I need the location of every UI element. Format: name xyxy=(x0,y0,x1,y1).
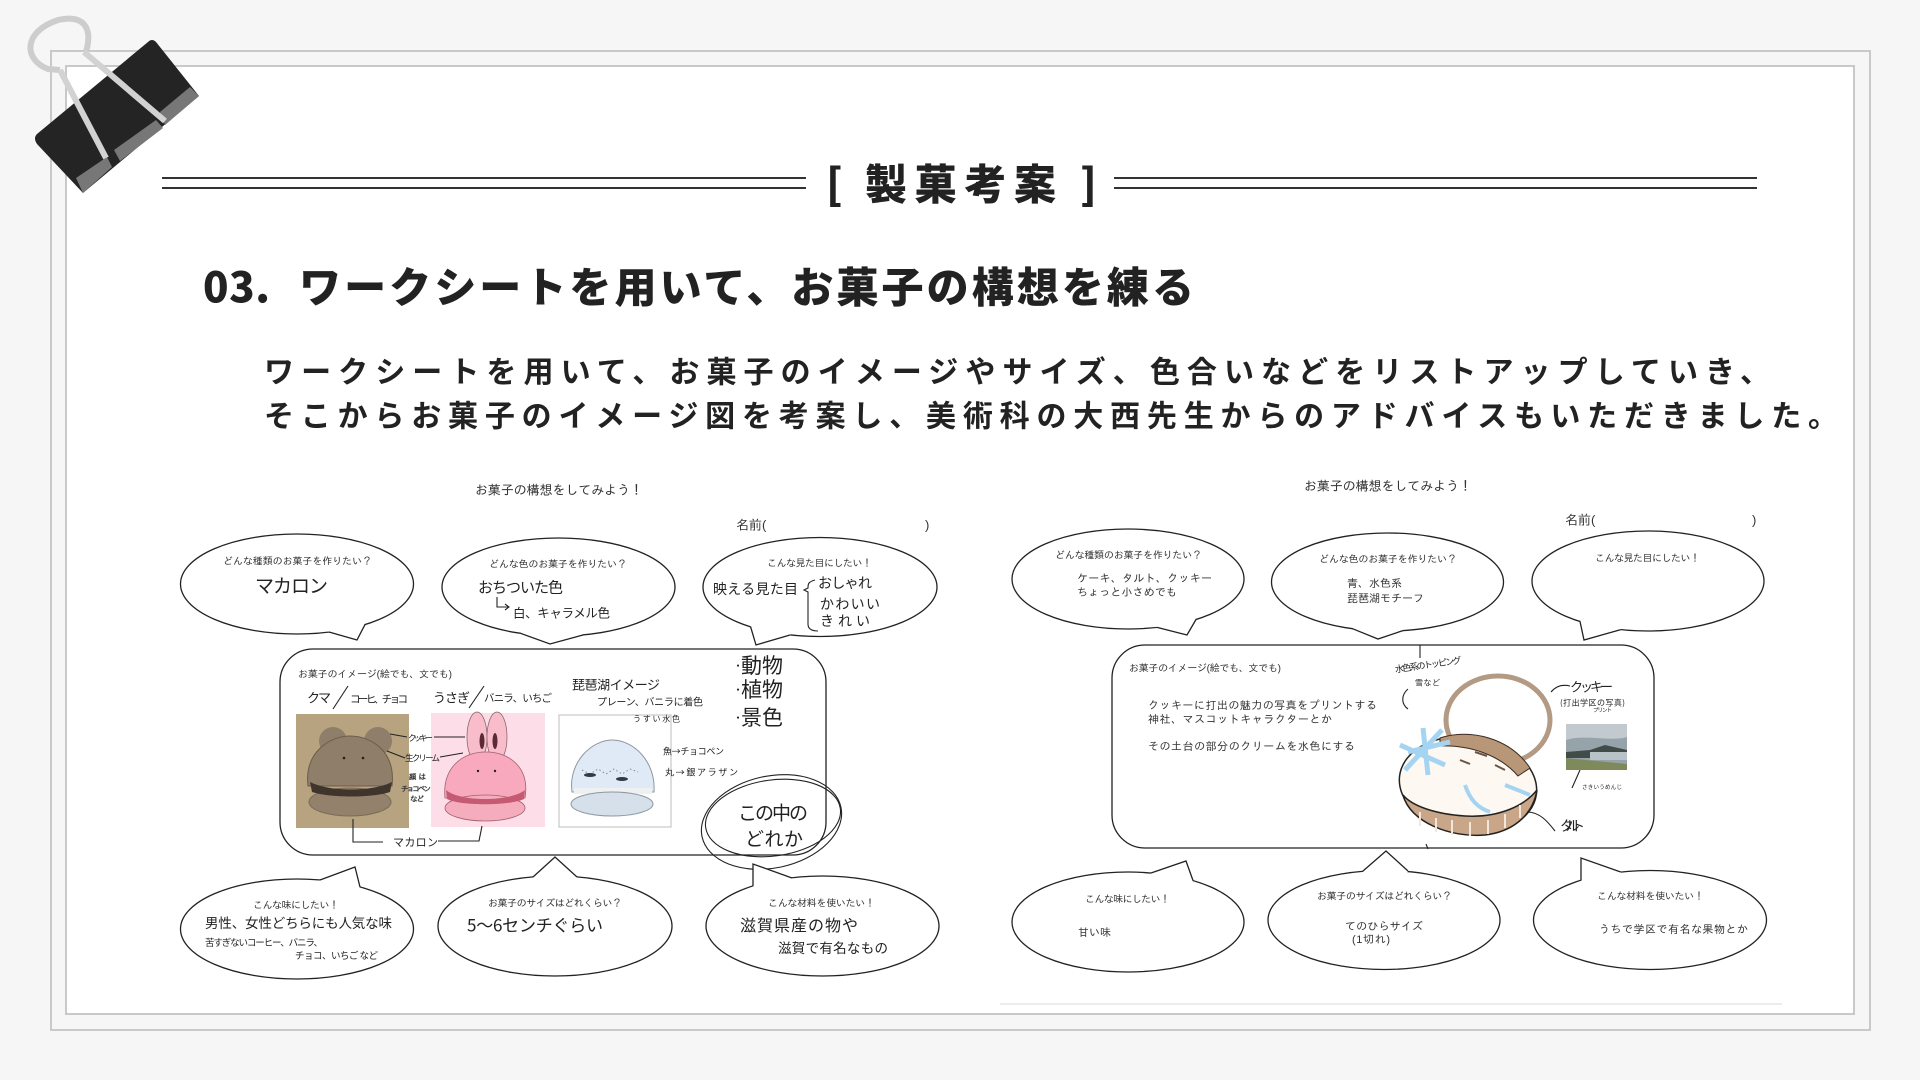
callouts: tart notes: (打出学区の写真) xyxy=(1560,698,1625,708)
callouts: tart notes: タルト xyxy=(1560,816,1585,836)
balloon: color: 白、キャラメル色 xyxy=(513,602,610,622)
notes: lake macaron xyxy=(572,674,738,778)
label: bear: クマ xyxy=(307,688,331,706)
balloon: color: 琵琶湖モチーフ xyxy=(1347,593,1424,605)
balloon: taste xyxy=(180,867,414,979)
image box right: お菓子のイメージ(絵でも、文でも) xyxy=(1129,662,1281,674)
name field right: ) xyxy=(1752,512,1756,528)
callouts: tart notes: 水色系のトッピング xyxy=(1394,653,1462,675)
balloon: taste: こんな味にしたい！ xyxy=(1085,894,1170,906)
balloon: type: どんな種類のお菓子を作りたい？ xyxy=(223,556,372,568)
worksheet title left: お菓子の構想をしてみよう！ xyxy=(475,482,643,498)
balloon: size: てのひらサイズ xyxy=(1345,920,1423,933)
title: 製菓考案 xyxy=(865,152,1056,212)
balloon: material: こんな材料を使いたい！ xyxy=(768,898,875,910)
notes: motif list xyxy=(733,650,783,732)
text: idea notes: クッキーに打出の魅力の写真をプリントする xyxy=(1148,699,1377,712)
callouts: macaron notes xyxy=(353,732,482,850)
worksheet title right: お菓子の構想をしてみよう！ xyxy=(1304,478,1472,494)
balloon: taste: 苦すぎないコーヒー、バニラ、 xyxy=(205,935,323,949)
notes: motif list: 植物 xyxy=(741,674,783,704)
title: [ xyxy=(826,152,843,212)
balloon: taste xyxy=(1012,861,1244,972)
balloon: look: かわいい xyxy=(820,594,880,614)
name field left: ) xyxy=(925,518,929,532)
image box left xyxy=(280,649,851,882)
balloon: color: おちついた色 xyxy=(478,576,563,598)
callouts: macaron notes: チョコペン xyxy=(401,784,431,794)
heading: ワークシートを用いて、お菓子の構想を練る xyxy=(299,254,1194,316)
circled note: どれか xyxy=(745,824,803,852)
icon: binder clip xyxy=(30,19,199,193)
panel: worksheet right xyxy=(1000,478,1782,1004)
balloon: look: こんな見た目にしたい！ xyxy=(1595,554,1700,564)
image box left: お菓子のイメージ(絵でも、文でも) xyxy=(298,668,452,680)
name field left: 名前( xyxy=(736,518,767,532)
balloon: material: こんな材料を使いたい！ xyxy=(1597,890,1704,902)
balloon: look xyxy=(703,538,937,645)
balloon: size: (1切れ) xyxy=(1352,934,1390,946)
name field right: 名前( xyxy=(1565,512,1596,528)
balloon: size: お菓子のサイズはどれくらい？ xyxy=(488,898,622,910)
name field left xyxy=(736,518,929,532)
balloon: type: ケーキ、タルト、クッキー xyxy=(1077,573,1212,585)
callouts: macaron notes: クッキー xyxy=(408,732,433,744)
illustration: rabbit macaron xyxy=(431,712,545,827)
text: idea notes: 神社、マスコットキャラクターとか xyxy=(1148,714,1332,726)
balloon: color: 青、水色系 xyxy=(1347,578,1402,590)
balloon: type: どんな種類のお菓子を作りたい？ xyxy=(1055,550,1202,562)
label: rabbit xyxy=(433,686,552,708)
label: rabbit: バニラ、いちご xyxy=(484,690,552,706)
balloon: size: 5〜6センチぐらい xyxy=(467,912,603,936)
notes: lake macaron: 丸→銀アラザン xyxy=(665,766,738,778)
balloon: color xyxy=(442,538,675,644)
notes: lake macaron: うすい水色 xyxy=(633,714,680,724)
balloon: taste: 男性、女性どちらにも人気な味 xyxy=(205,912,392,932)
body text xyxy=(264,356,1838,434)
heading: 03. xyxy=(203,254,270,316)
balloon: material xyxy=(706,864,939,976)
text: idea notes: その土台の部分のクリームを水色にする xyxy=(1148,740,1355,753)
callouts: macaron notes: など xyxy=(410,794,424,804)
balloon: color xyxy=(1272,533,1504,639)
callouts: tart notes: クッキー xyxy=(1570,676,1613,696)
balloon: look: こんな見た目にしたい！ xyxy=(767,558,872,570)
callouts: tart notes: 雪など xyxy=(1415,678,1440,688)
image box right xyxy=(1112,645,1654,849)
balloon: look: おしゃれ xyxy=(818,573,872,593)
callouts: macaron notes: 生クリーム xyxy=(405,752,440,764)
balloon: type xyxy=(1012,529,1244,635)
label: bear: コーヒ、チョコ xyxy=(350,692,408,706)
notes: motif list: ・ xyxy=(733,658,743,672)
title xyxy=(162,152,1757,212)
notes: lake macaron: プレーン、バニラに着色 xyxy=(597,694,703,708)
balloon: size xyxy=(438,857,672,976)
notes: lake macaron: 琵琶湖イメージ xyxy=(572,674,660,694)
notes: motif list: ・ xyxy=(733,682,743,696)
balloon: type: マカロン xyxy=(255,572,328,598)
balloon: color: どんな色のお菓子を作りたい？ xyxy=(1319,554,1457,566)
balloon: size xyxy=(1268,851,1500,970)
label: bear xyxy=(307,686,408,709)
callouts: macaron notes: マカロン xyxy=(393,834,438,850)
balloon: material: 滋賀で有名なもの xyxy=(778,937,888,957)
balloon: color: どんな色のお菓子を作りたい？ xyxy=(489,558,627,570)
balloon: look xyxy=(1532,531,1764,640)
text: idea notes xyxy=(1148,699,1377,753)
callouts: tart notes xyxy=(1394,645,1625,849)
circled note: この中の xyxy=(738,798,808,826)
circled note xyxy=(692,762,851,882)
balloon: material: 滋賀県産の物や xyxy=(740,912,858,936)
balloon: type xyxy=(180,534,414,640)
notes: motif list: ・ xyxy=(733,710,743,724)
notes: motif list: 動物 xyxy=(741,650,783,680)
balloon: taste: こんな味にしたい！ xyxy=(253,900,339,912)
callouts: macaron notes: 顔は xyxy=(409,772,426,782)
callouts: tart notes: プリント xyxy=(1593,706,1612,714)
label: rabbit: うさぎ xyxy=(433,688,470,706)
illustration: tart xyxy=(1393,676,1550,842)
balloon: size: お菓子のサイズはどれくらい？ xyxy=(1317,890,1452,902)
body text: ワークシートを用いて、お菓子のイメージやサイズ、色合いなどをリストアップしていき、 xyxy=(264,356,1770,390)
balloon: look: きれい xyxy=(820,611,870,631)
name field right xyxy=(1565,512,1756,528)
notes: motif list: 景色 xyxy=(741,702,783,732)
illustration: bear macaron xyxy=(296,714,409,828)
callouts: tart notes: さきいうめんじ xyxy=(1582,783,1622,791)
balloon: material: うちで学区で有名な果物とか xyxy=(1599,923,1748,936)
balloon: taste: チョコ、いちご など xyxy=(295,948,378,962)
body text: そこからお菓子のイメージ図を考案し、美術科の大西先生からのアドバイスもいただきました。 xyxy=(264,400,1838,434)
balloon: look: 映える見た目 xyxy=(713,579,798,599)
balloon: material xyxy=(1534,858,1766,970)
balloon: type: ちょっと小さめでも xyxy=(1077,587,1177,599)
illustration: lake photo xyxy=(1566,724,1627,770)
notes: lake macaron: 魚→チョコペン xyxy=(663,744,724,758)
illustration: lake macaron xyxy=(559,715,671,827)
title: ] xyxy=(1080,152,1097,212)
panel: worksheet left xyxy=(180,482,939,979)
balloon: taste: 甘い味 xyxy=(1078,927,1111,939)
